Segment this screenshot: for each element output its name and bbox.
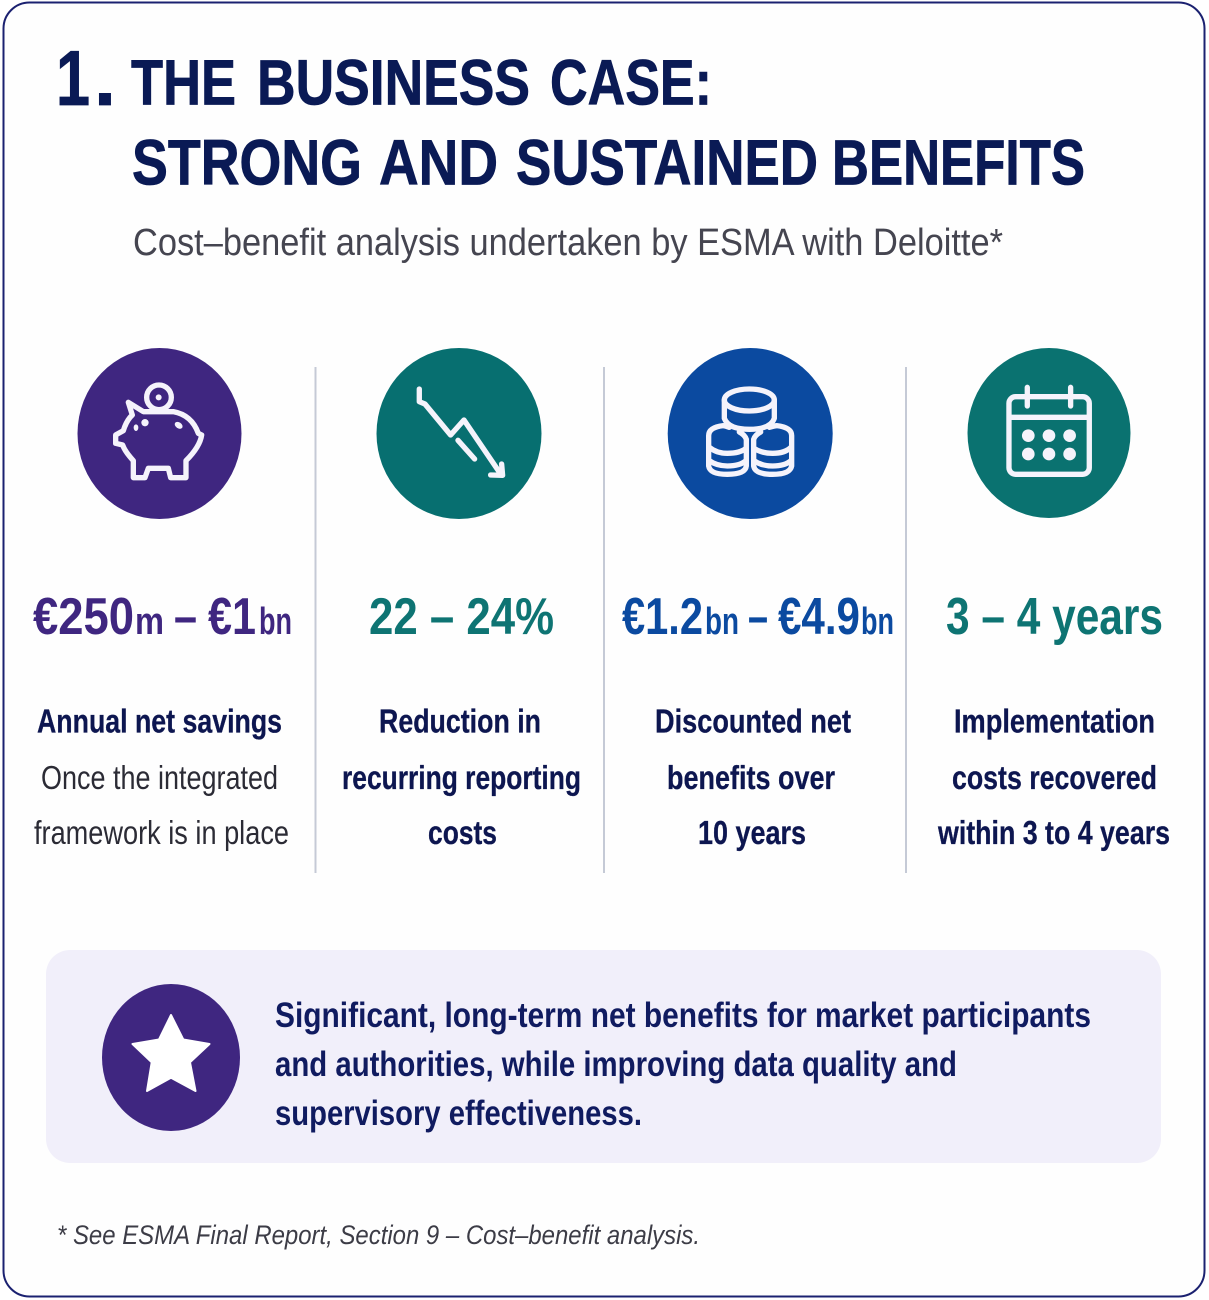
title: AND — [379, 126, 498, 198]
title: . — [94, 34, 116, 122]
icon: coin stacks — [668, 348, 833, 519]
icon: piggy bank — [78, 348, 242, 519]
callout text: and authorities, while improving data quality and — [275, 1045, 957, 1084]
title: BENEFITS — [832, 126, 1085, 198]
title: CASE: — [550, 46, 712, 118]
stat: discounted benefits: €1.2 — [622, 588, 703, 646]
label: reduction in recurring reporting costs: costs — [428, 814, 497, 851]
stat: payback: 3 – 4 years — [946, 588, 1163, 646]
label: discounted net benefits over 10 years: Discounted net — [655, 702, 851, 740]
title — [56, 34, 1085, 198]
column: annual net savings — [33, 348, 292, 851]
label: annual net savings: Annual net savings — [37, 702, 282, 740]
column: reporting cost reduction — [342, 348, 581, 851]
description: once the framework is in place — [34, 759, 289, 851]
stat: annual savings: bn — [259, 601, 292, 643]
label: discounted net benefits over 10 years: 10 years — [698, 814, 806, 851]
label: implementation costs recovered: costs recovered — [952, 759, 1157, 796]
stat: annual savings: – — [174, 588, 197, 646]
title: SUSTAINED — [516, 126, 818, 198]
footnote: * See ESMA Final Report, Section 9 – Cost–benefit analysis. — [57, 1220, 700, 1250]
icon: star — [102, 984, 240, 1131]
title: BUSINESS — [257, 46, 530, 118]
stat: reduction: 22 – 24% — [369, 588, 554, 646]
title: THE — [131, 46, 236, 118]
label: implementation costs recovered — [937, 702, 1170, 851]
label: discounted net benefits over 10 years: benefits over — [667, 759, 835, 796]
callout banner — [46, 950, 1161, 1163]
callout text: supervisory effectiveness. — [275, 1094, 642, 1133]
icon: falling arrow — [376, 348, 542, 519]
description: once the framework is in place: framework is in place — [34, 814, 289, 851]
stat: annual savings: €250 — [33, 588, 134, 646]
label: reduction in recurring reporting costs: recurring reporting — [342, 759, 581, 796]
subtitle: Cost–benefit analysis undertaken by ESMA with Deloitte* — [133, 222, 1003, 264]
label: discounted net benefits over 10 years — [655, 702, 851, 851]
stat: annual savings: m — [135, 601, 164, 643]
column: payback period — [937, 348, 1170, 851]
title: 1 — [56, 34, 90, 122]
label: reduction in recurring reporting costs: Reduction in — [379, 702, 541, 740]
stat: discounted benefits: bn — [705, 601, 739, 643]
description: once the framework is in place: Once the integrated — [41, 759, 278, 796]
label: reduction in recurring reporting costs — [342, 702, 581, 851]
icon: calendar — [968, 348, 1130, 518]
label: implementation costs recovered: Implementation — [954, 702, 1155, 740]
callout text: Significant, long-term net benefits for market participants — [275, 996, 1091, 1035]
stat: discounted benefits: – — [748, 588, 768, 646]
column: discounted net benefits — [622, 348, 894, 851]
stat: annual savings: €1 — [208, 588, 256, 646]
stat: discounted benefits: bn — [861, 601, 894, 643]
callout text — [275, 996, 1091, 1133]
stat: discounted benefits: €4.9 — [778, 588, 860, 646]
title: STRONG — [132, 126, 362, 198]
